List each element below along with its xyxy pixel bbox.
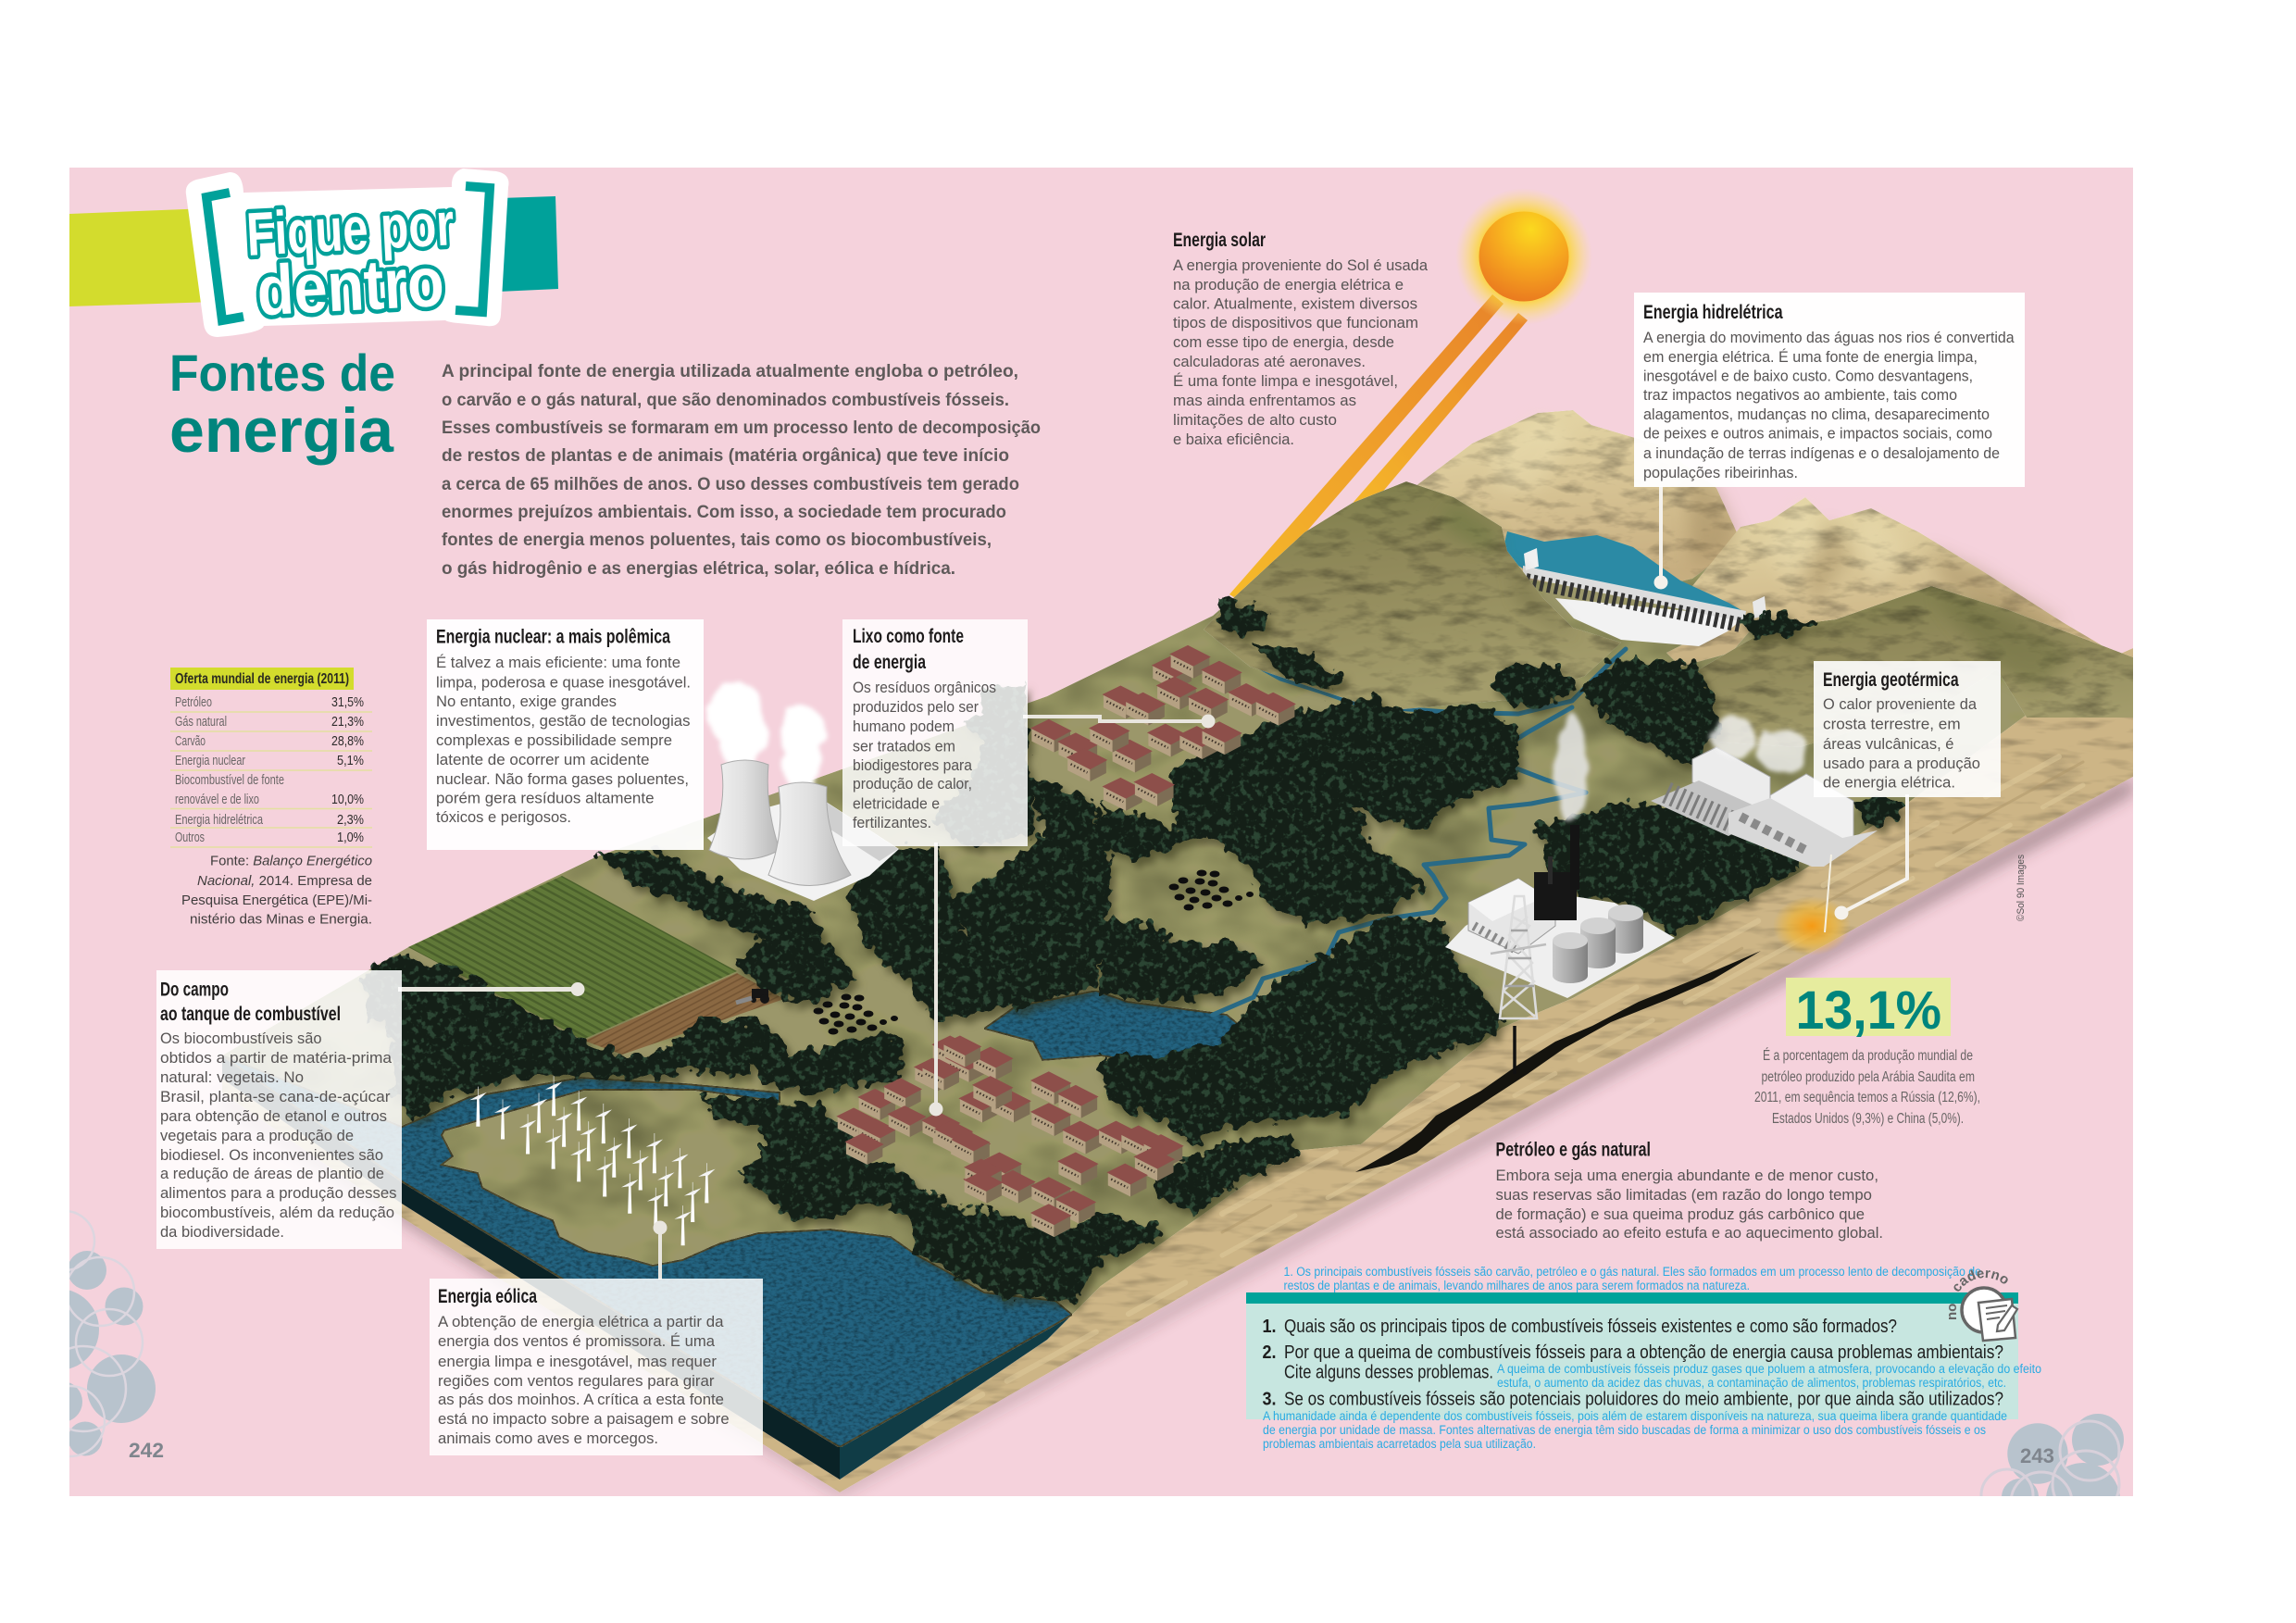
wind body text: está no impacto sobre a paisagem e sobre [438,1410,730,1428]
main title [169,343,395,466]
waste body text: eletricidade e [853,794,940,813]
callout caption: Estados Unidos (9,3%) e China (5,0%). [1772,1111,1964,1127]
biofuel body text: vegetais para a produção de [160,1127,354,1144]
biofuel body text [160,1030,396,1241]
solar body text: na produção de energia elétrica e [1173,276,1404,293]
biofuel heading [160,980,341,1025]
panel: biofuels [156,970,402,1249]
solar body text: limitações de alto custo [1173,411,1337,429]
photo credit: ©Sol 90 Images [2015,855,2027,921]
panel: wind energy [430,1279,763,1455]
nuclear body text [436,654,691,826]
energy supply table: 31,5% [331,695,364,710]
answer 3: A humanidade ainda é dependente dos combustíveis fósseis, pois além de estarem disponíveis na natureza, sua queima libera grande quantidade [1263,1409,2007,1423]
page number 243: 243 [2020,1444,2054,1467]
intro paragraph: A principal fonte de energia utilizada atualmente engloba o petróleo, [442,362,1018,381]
answer 3: problemas ambientais acarretados pela sua utilização. [1263,1437,1536,1451]
page number 242: 242 [129,1439,164,1462]
land surface [222,518,2133,1447]
panel: hydroelectric energy [1634,293,2025,487]
forests [363,598,1904,1307]
pointer: waste upper village [1023,715,1215,728]
waste body text: Os resíduos orgânicos [853,679,996,696]
wind body text [438,1313,730,1447]
biofuel body text: Os biocombustíveis são [160,1030,322,1047]
waste body text [853,679,996,831]
waste body text: produzidos pelo ser [853,698,979,716]
waste body text: fertilizantes. [853,814,931,831]
well pipe [1513,1026,1516,1074]
chimney smoke [1554,713,1588,824]
solar body text: tipos de dispositivos que funcionam [1173,314,1418,331]
oil body text: está associado ao efeito estufa e ao aquecimento global. [1496,1224,1883,1242]
oil body text: suas reservas são limitadas (em razão do longo tempo [1496,1186,1872,1204]
callout caption: 2011, em sequência temos a Rússia (12,6%), [1754,1090,1980,1105]
energy supply table: renovável e de lixo [175,793,259,807]
solar body text: com esse tipo de energia, desde [1173,333,1394,351]
biofuel body text: a redução de áreas de plantio de [160,1165,384,1182]
energy supply table: Biocombustível de fonte [175,773,284,788]
sand side of the block [222,648,2133,1492]
table source note: nistério das Minas e Energia. [190,911,372,928]
biofuel body text: da biodiversidade. [160,1223,284,1241]
geothermal body text: áreas vulcânicas, é [1823,735,1953,753]
crop field [408,876,784,1055]
solar body text: calor. Atualmente, existem diversos [1173,294,1417,313]
geothermal body text: usado para a produção [1823,755,1980,772]
hydro heading: Energia hidrelétrica [1643,302,1783,323]
tan rocky mountains [1416,410,2133,676]
text block: solar energy [1173,230,1429,448]
solar body text: É uma fonte limpa e inesgotável, [1173,372,1398,390]
main title: Fontes de [169,343,395,402]
wind body text: animais como aves e morcegos. [438,1429,658,1447]
geothermal body text [1823,695,1980,791]
energy supply table: Oferta mundial de energia (2011) [175,671,349,687]
sea [222,1055,1072,1447]
geothermal plant [1651,716,1878,867]
solar heading: Energia solar [1173,230,1266,251]
solar body text: A energia proveniente do Sol é usada [1173,256,1429,274]
panel: no caderno questions [1246,1265,2041,1451]
oil body text: Embora seja uma energia abundante e de menor custo, [1496,1167,1878,1184]
waste heading [853,626,964,673]
energy supply table: Outros [175,830,205,845]
main title: energia [169,395,394,466]
smoke [707,680,825,792]
answer 1 [1283,1265,1981,1292]
wind body text: A obtenção de energia elétrica a partir da [438,1313,724,1330]
wind body text: energia dos ventos é promissora. É uma [438,1332,716,1350]
village: upper houses [1030,645,1296,811]
question 1: 1. [1263,1317,1276,1337]
biofuel heading: Do campo [160,980,229,1000]
icon: no caderno: no [1944,1304,1960,1320]
panel: geothermal energy [1814,661,2001,797]
question 2 [1263,1342,2003,1383]
table source note [181,854,372,928]
waste body text: biodigestores para [853,756,972,774]
biofuel body text: biocombustíveis, além da redução [160,1204,394,1221]
cattle herds [813,870,1254,1035]
energy supply table: 10,0% [331,793,364,807]
hydro body text: traz impactos negativos ao ambiente, tais como [1643,386,1957,404]
question 3: Se os combustíveis fósseis são potenciais poluidores do meio ambiente, por que ainda são utilizados? [1284,1390,2003,1410]
answer 2 [1497,1362,2041,1390]
icon: sun [1455,188,1592,325]
callout: 13,1%: 13,1% [1796,980,1941,1041]
panel: nuclear energy [427,619,704,850]
question 2: Por que a queima de combustíveis fósseis para a obtenção de energia causa problemas ambientais? [1284,1342,2003,1363]
nuclear body text: investimentos, gestão de tecnologias [436,712,691,730]
rivers [1208,629,1626,1015]
geothermal heading: Energia geotérmica [1823,669,1959,691]
energy supply table: Petróleo [175,695,212,710]
table source note: Pesquisa Energética (EPE)/Mi- [181,893,372,908]
pointer: geothermal [1835,794,1907,920]
solar body text: e baixa eficiência. [1173,431,1294,448]
biofuel body text: biodiesel. Os inconvenientes são [160,1146,383,1164]
callout caption: É a porcentagem da produção mundial de [1763,1048,1973,1064]
nuclear body text: limpa, poderosa e quase inesgotável. [436,674,691,692]
energy supply table: 5,1% [337,754,364,768]
plant steam [1711,716,1808,772]
intro paragraph: de restos de plantas e de animais (matéria orgânica) que teve início [442,446,1009,466]
answer 1: 1. Os principais combustíveis fósseis são carvão, petróleo e o gás natural. Eles são formados em um processo lento de decomposição de [1283,1265,1981,1279]
energy supply table: Energia hidrelétrica [175,813,264,828]
nuclear heading: Energia nuclear: a mais polêmica [436,626,670,647]
lake [984,991,1255,1068]
pointer: waste lower village [930,843,942,1117]
intro paragraph: a cerca de 65 milhões de anos. O uso desses combustíveis tem gerado [442,475,1019,494]
biofuel body text: natural: vegetais. No [160,1068,304,1086]
oil heading: Petróleo e gás natural [1496,1140,1651,1161]
reservoir [1502,531,1746,613]
nuclear body text: É talvez a mais eficiente: uma fonte [436,654,680,671]
intro paragraph [442,362,1041,579]
nuclear body text: nuclear. Não forma gases poluentes, [436,770,689,788]
table source note: Fonte: Balanço Energético [210,854,372,868]
energy supply table: Gás natural [175,715,227,730]
biofuel body text: Brasil, planta-se cana-de-açúcar [160,1088,391,1105]
wind body text: energia limpa e inesgotável, mas requer [438,1353,717,1370]
nuclear body text: No entanto, exige grandes [436,693,617,710]
solar body text [1173,256,1429,448]
nuclear body text: complexas e possibilidade sempre [436,731,672,749]
biofuel heading: ao tanque de combustível [160,1004,341,1025]
energy supply table: Carvão [175,734,206,749]
intro paragraph: enormes prejuízos ambientais. Com isso, a sociedade tem procurado [442,503,1006,522]
diorama: isometric landscape [222,410,2133,1492]
biofuel body text: alimentos para a produção desses [160,1184,396,1202]
hydro body text: populações ribeirinhas. [1643,464,1798,481]
solar body text: mas ainda enfrentamos as [1173,392,1356,409]
section tag: Fique por dentro [69,169,558,337]
nuclear plant [707,680,899,901]
village: far-left houses [836,1035,1003,1203]
callout caption: petróleo produzido pela Arábia Saudita em [1761,1069,1975,1085]
decorative bubbles: left page [69,1210,156,1457]
panel: waste as energy [842,619,1028,846]
energy supply table: Energia nuclear [175,754,245,768]
table source note: Nacional, 2014. Empresa de [197,873,372,889]
oil derrick [1491,896,1546,1018]
hydro body text: A energia do movimento das águas nos rios é convertida [1643,329,2015,346]
geothermal body text: crosta terrestre, em [1823,716,1961,733]
icon: no caderno [1944,1269,2018,1342]
hydro body text: inesgotável e de baixo custo. Como desvantagens, [1643,368,1973,385]
dark side faces of the block [222,1055,1072,1479]
oil deposit seam [1355,951,1761,1172]
callout caption [1754,1048,1980,1127]
callout: 13,1% [1754,978,1980,1127]
nuclear body text: porém gera resíduos altamente [436,789,654,807]
hydro body text: em energia elétrica. É uma fonte de energia limpa, [1643,348,1978,366]
decorative bubbles: right page [1979,1414,2124,1496]
wind body text: as pás dos moinhos. A crítica a esta fonte [438,1391,724,1408]
pointer: dam [1653,486,1668,589]
intro paragraph: o gás hidrogênio e as energias elétrica, solar, eólica e hídrica. [442,559,955,579]
intro paragraph: o carvão e o gás natural, que são denominados combustíveis fósseis. [442,391,1009,410]
oil body text: de formação) e sua queima produz gás carbônico que [1496,1205,1865,1223]
section tag: Fique por dentro: dentro [255,243,446,331]
waste body text: produção de calor, [853,775,972,793]
nuclear body text: tóxicos e perigosos. [436,808,571,826]
energy supply table: 21,3% [331,715,364,730]
intro paragraph: fontes de energia menos poluentes, tais como os biocombustíveis, [442,531,992,550]
biofuel body text: obtidos a partir de matéria-prima [160,1049,393,1067]
question 1: Quais são os principais tipos de combustíveis fósseis existentes e como são formados? [1284,1317,1897,1337]
oil body text [1496,1167,1883,1242]
question 2: 2. [1263,1342,1276,1363]
solar body text: calculadoras até aeronaves. [1173,353,1366,370]
green hills [1204,481,2133,747]
biofuel body text: para obtenção de etanol e outros [160,1107,387,1125]
text block: oil and natural gas [1496,1140,1883,1242]
wind body text: regiões com ventos regulares para girar [438,1372,715,1390]
intro paragraph: Esses combustíveis se formaram em um processo lento de decomposição [442,418,1041,438]
sun rays [1229,294,1528,604]
page background: pink spread [69,168,2133,1496]
waste heading: Lixo como fonte [853,626,964,647]
question 3: 3. [1263,1390,1276,1410]
hydro body text: de peixes e outros animais, e impactos sociais, como [1643,425,1992,443]
answer 2: estufa, o aumento da acidez das chuvas, a contaminação de alimentos, problemas respiratórios, etc. [1497,1376,2006,1390]
waste body text: ser tratados em [853,737,955,755]
thermal oil plant [1445,713,1675,998]
energy supply table: 1,0% [337,830,364,845]
energy supply table: 28,8% [331,734,364,749]
nuclear body text: latente de ocorrer um acidente [436,751,650,768]
dam [1523,548,1766,646]
wind turbines [469,1076,716,1245]
village: lower houses [914,1036,1184,1237]
hydro body text: a inundação de terras indígenas e o desalojamento de [1643,444,2000,462]
wind heading: Energia eólica [438,1286,537,1307]
energy supply table: 2,3% [337,813,364,828]
question 2: Cite alguns desses problemas. [1284,1363,1493,1383]
icon: no caderno: caderno [1953,1269,2008,1292]
energy supply table [170,668,372,847]
section tag: Fique por dentro: Fique por [244,189,455,268]
hydro body text [1643,329,2015,481]
answer 1: restos de plantas e de animais, levando milhares de anos para serem formados na natureza. [1283,1279,1750,1292]
waste body text: humano podem [853,718,955,735]
answer 2: A queima de combustíveis fósseis produz gases que poluem a atmosfera, provocando a elevação do efeito [1497,1362,2041,1376]
tractor [736,989,769,1004]
answer 3 [1263,1409,2007,1451]
waste heading: de energia [853,652,926,673]
hydro body text: alagamentos, mudanças no clima, desaparecimento [1643,406,1990,423]
geothermal body text: O calor proveniente da [1823,695,1978,713]
pointer: biofuel field [398,982,585,996]
answer 3: de energia por unidade de massa. Fontes alternativas de energia têm sido buscadas de forma a minimizar o uso dos combustíveis fósseis e os [1263,1423,1986,1437]
geothermal heat spot [1773,896,1851,955]
pointer: wind farm [654,1220,667,1280]
geothermal body text: de energia elétrica. [1823,774,1955,791]
